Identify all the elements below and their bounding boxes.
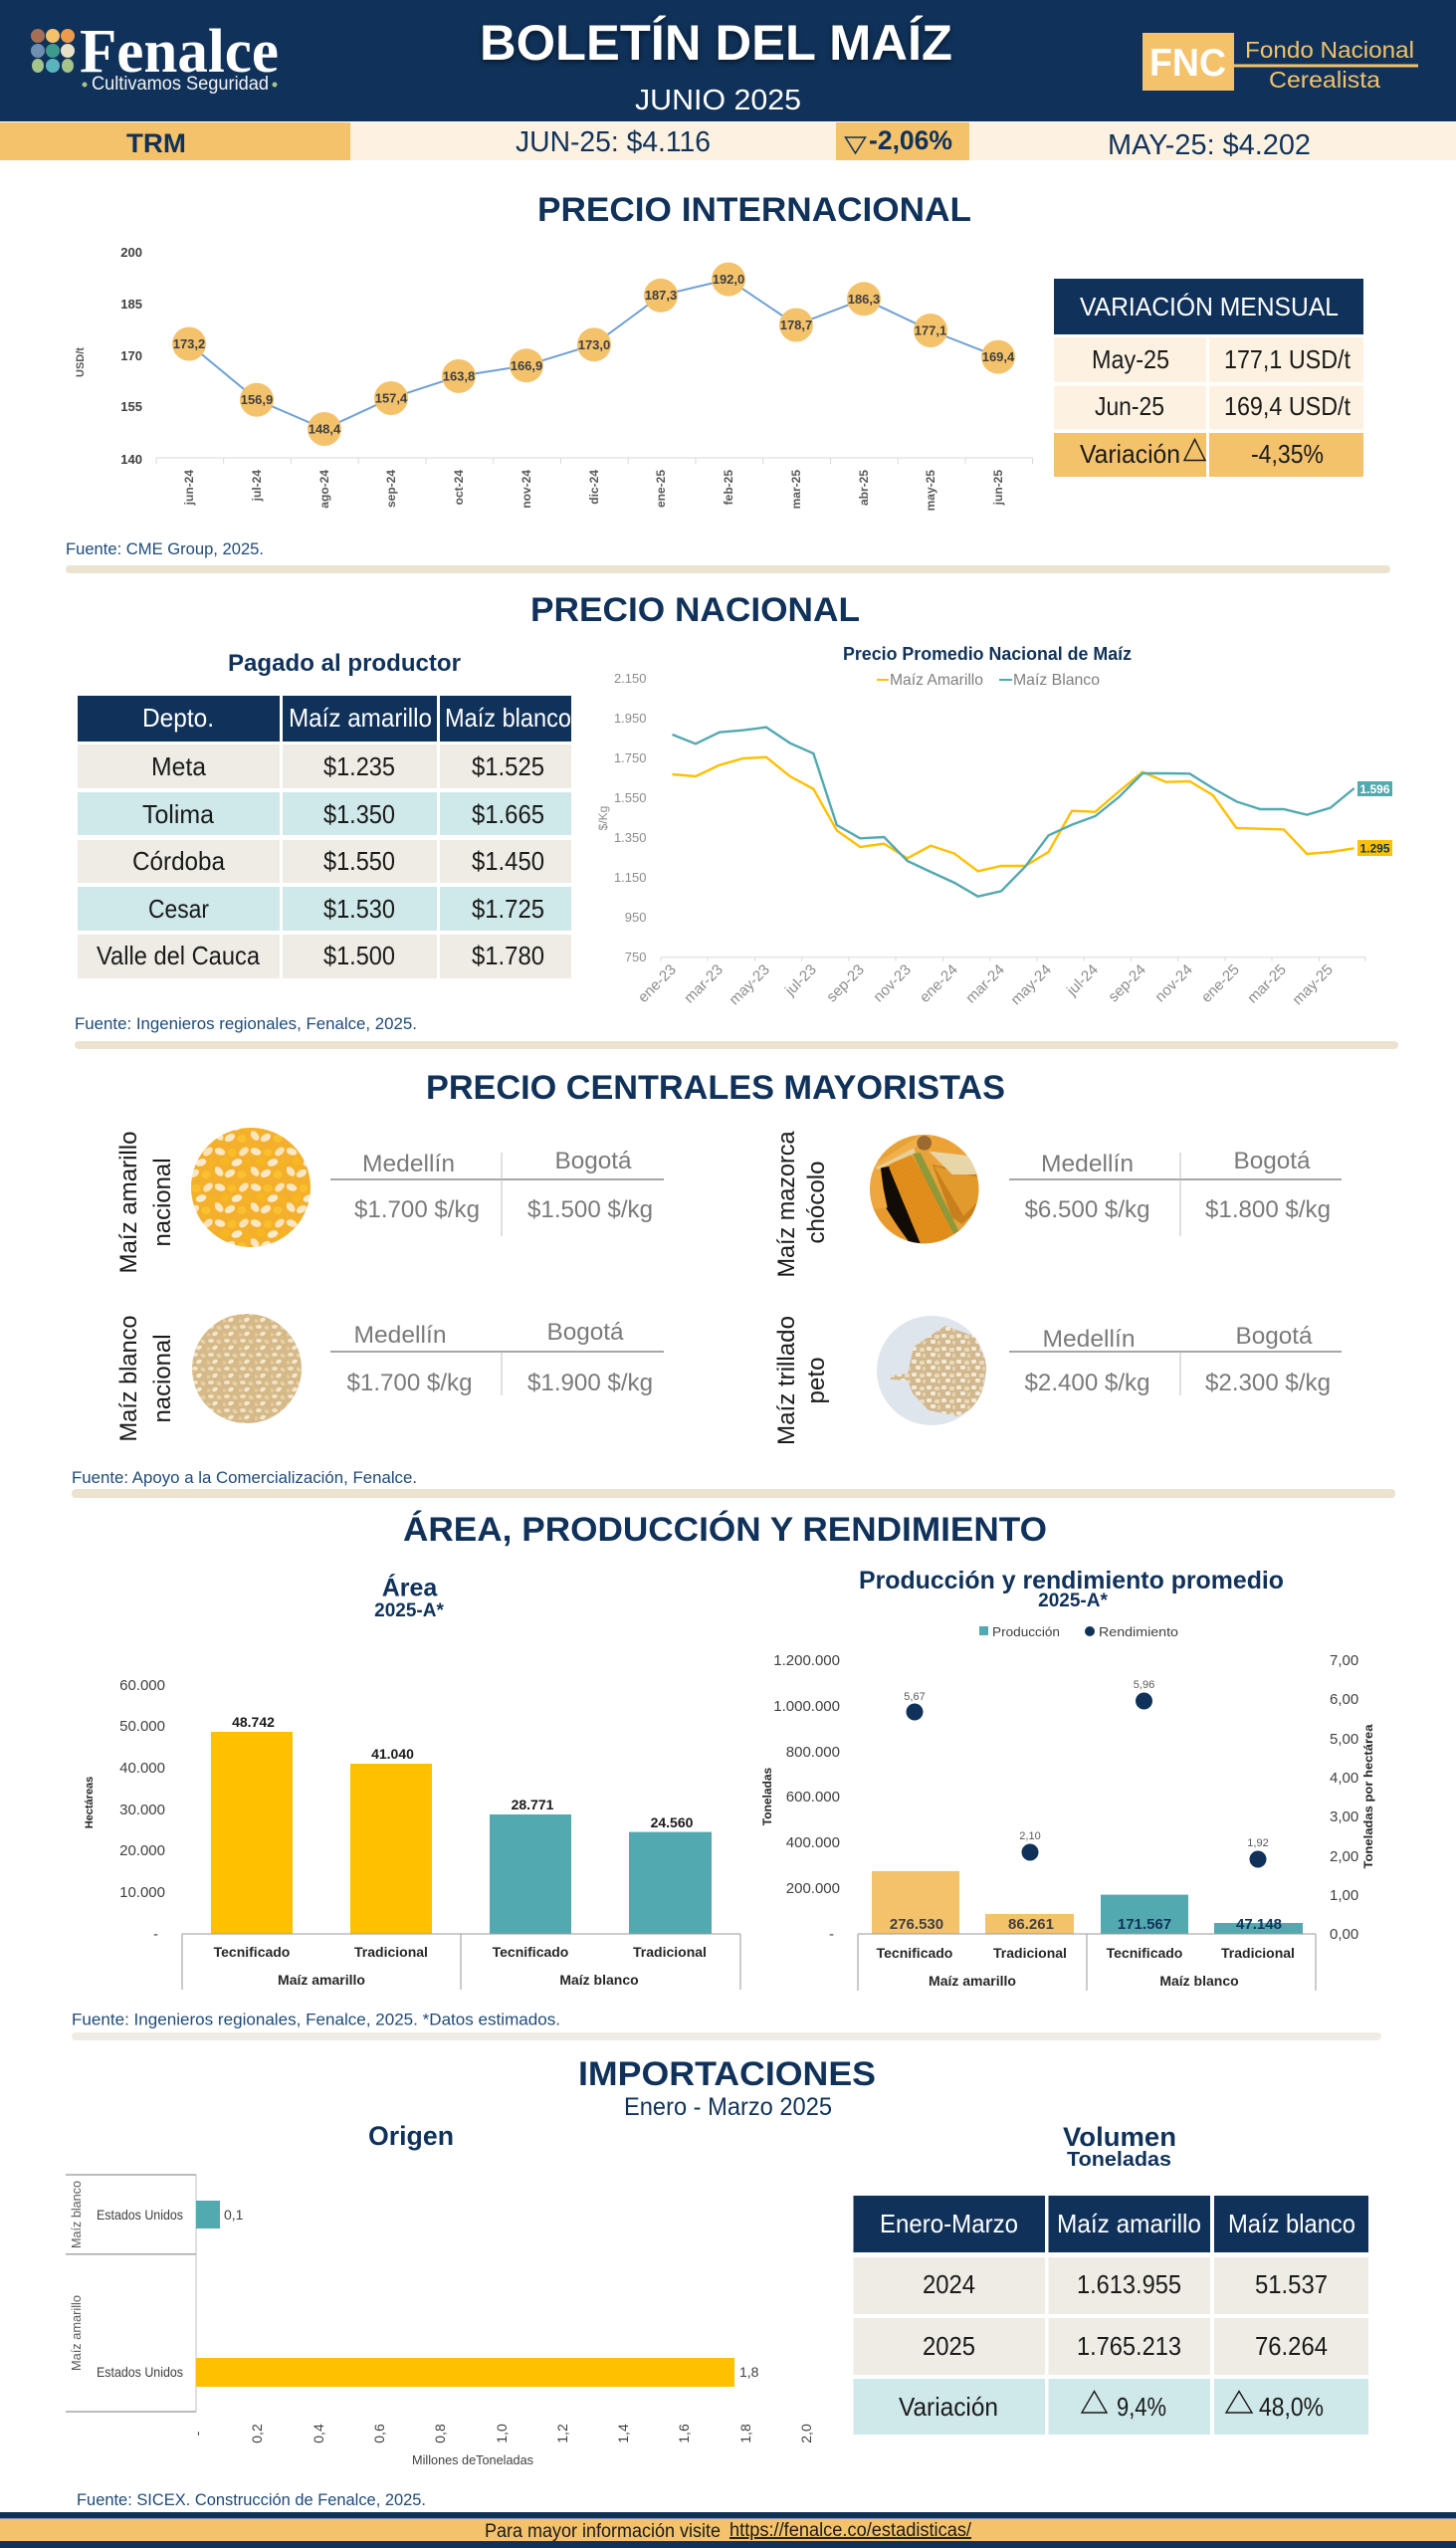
combo chart: producción y rendimiento: Maíz amarillo	[929, 1973, 1016, 1989]
table: volumen: Variación	[899, 2392, 998, 2422]
line chart: international price: 170	[120, 348, 142, 363]
subheading: period: Enero - Marzo 2025	[624, 2093, 832, 2121]
line chart: precio promedio nacional: 1.550	[614, 790, 647, 805]
logo: FNC	[1143, 33, 1418, 93]
line chart: international price	[75, 245, 1033, 511]
panel: maíz amarillo nacional: $1.500 $/kg	[527, 1196, 653, 1223]
line chart: precio promedio nacional: nov-24	[1151, 961, 1196, 1005]
line chart: precio promedio nacional: may-25	[1289, 961, 1337, 1008]
line chart: precio promedio nacional: nov-23	[870, 961, 915, 1005]
bar chart: área: 40.000	[119, 1760, 165, 1777]
line chart: precio promedio nacional: 1.950	[614, 711, 647, 726]
bar chart: área: 10.000	[119, 1884, 165, 1901]
line chart: international price: sep-24	[384, 470, 398, 508]
combo chart: producción y rendimiento: 47.148	[1236, 1916, 1282, 1933]
photo: white corn	[192, 1314, 302, 1423]
panel: maíz trillado peto: Medellín	[1043, 1326, 1135, 1353]
legend: Maíz Blanco	[1013, 672, 1100, 689]
bar chart: origen: -	[189, 2431, 205, 2436]
table: volumen: 48,0%	[1259, 2392, 1324, 2422]
bar chart: área: -	[153, 1926, 158, 1943]
logo: FNC: Cerealista	[1269, 67, 1380, 93]
chart heading: origen: Origen	[368, 2121, 454, 2151]
chart heading: área: 2025-A*	[374, 1600, 444, 1621]
TRM band	[0, 122, 1456, 161]
line chart: international price: dic-24	[587, 470, 601, 505]
TRM band: JUN-25: $4.116	[516, 126, 711, 158]
bar chart: área: Tecnificado	[214, 1944, 290, 1960]
line chart: precio promedio nacional: jul-23	[781, 961, 820, 999]
table: pagado al productor: Valle del Cauca	[97, 941, 260, 970]
panel: maíz trillado peto	[773, 1316, 1342, 1445]
line chart: international price: oct-24	[452, 470, 466, 505]
table: pagado al productor: $1.500	[323, 941, 395, 970]
line chart: international price: jun-25	[991, 470, 1005, 506]
legend	[979, 1624, 1178, 1639]
line chart: precio promedio nacional: sep-24	[1105, 961, 1149, 1005]
table: pagado al productor: $1.235	[323, 751, 395, 781]
subtitle: month: JUNIO 2025	[635, 85, 801, 116]
footer band	[0, 2512, 1456, 2548]
bar chart: origen: 1,8	[737, 2424, 753, 2443]
value tag: amarillo: 1.295	[1359, 842, 1390, 856]
combo chart: producción y rendimiento: 5,00	[1330, 1731, 1358, 1748]
source: SICEX: Fuente: SICEX. Construcción de Fenalce, 2025.	[77, 2490, 426, 2509]
bar chart: origen: Estados Unidos	[97, 2364, 183, 2380]
line chart: international price: nov-24	[520, 470, 533, 509]
line chart: precio promedio nacional: 750	[625, 950, 647, 964]
legend: Rendimiento	[1099, 1624, 1178, 1639]
panel: maíz blanco nacional: Bogotá	[547, 1319, 624, 1346]
chart heading: producción y rendimiento	[859, 1567, 1284, 1611]
line chart: precio promedio nacional: mar-24	[962, 961, 1008, 1006]
bar chart: origen: 0,1	[224, 2207, 244, 2223]
line chart: precio promedio nacional: 1.350	[614, 830, 647, 845]
source: CME: Fuente: CME Group, 2025.	[66, 539, 264, 558]
line chart: international price: 148,4	[309, 422, 341, 436]
line chart: international price: jul-24	[250, 470, 264, 502]
line chart: international price: 173,0	[578, 337, 610, 352]
legend: Producción	[992, 1624, 1060, 1639]
bar chart: origen: 1,0	[494, 2424, 510, 2443]
combo chart: producción y rendimiento: Tecnificado	[1107, 1945, 1182, 1961]
line chart: international price: 157,4	[375, 390, 408, 406]
table: pagado al productor: $1.550	[323, 846, 395, 876]
combo chart: producción y rendimiento: 5,96	[1134, 1679, 1154, 1691]
bar chart: área: Hectáreas	[84, 1777, 96, 1828]
line chart: precio promedio nacional: may-23	[726, 961, 773, 1008]
line chart: precio promedio nacional: 1.750	[614, 750, 647, 765]
panel: maíz trillado peto: $2.400 $/kg	[1025, 1370, 1150, 1396]
source: ingenieros regionales, datos estimados: Fuente: Ingenieros regionales, Fenalce, 2025. *Datos estimados.	[72, 2011, 560, 2028]
bar chart: origen: 1,2	[554, 2424, 570, 2443]
heading: importaciones: IMPORTACIONES	[578, 2055, 876, 2093]
table heading: volumen: Toneladas	[1067, 2149, 1171, 2171]
panel: maíz trillado peto: Maíz trillado	[773, 1316, 800, 1445]
line chart: international price: may-25	[924, 470, 937, 511]
line chart: international price: 140	[120, 452, 142, 467]
heading: precio internacional: PRECIO INTERNACIONAL	[537, 191, 971, 229]
line chart: precio promedio nacional: jul-24	[1063, 961, 1102, 999]
panel: maíz amarillo nacional: Medellín	[362, 1151, 455, 1177]
bar chart: área: 30.000	[119, 1802, 165, 1818]
combo chart: producción y rendimiento: 400.000	[786, 1834, 840, 1851]
panel: maíz blanco nacional: $1.700 $/kg	[346, 1370, 472, 1396]
bar chart: área: 60.000	[119, 1677, 165, 1694]
table: pagado al productor: Depto.	[142, 703, 214, 733]
table heading: volumen: Volumen	[1063, 2122, 1176, 2152]
panel: maíz blanco nacional	[115, 1314, 664, 1441]
table: variación mensual: 169,4 USD/t	[1224, 391, 1352, 421]
bar chart: origen: 1,6	[676, 2424, 692, 2443]
panel: maíz trillado peto: peto	[803, 1358, 830, 1403]
table: variación mensual: May-25	[1092, 344, 1169, 374]
legend: Maíz Amarillo	[890, 672, 983, 689]
panel: maíz amarillo nacional: Bogotá	[555, 1148, 632, 1174]
panel: maíz mazorca chócolo: chócolo	[803, 1161, 830, 1244]
line chart: international price: 187,3	[645, 288, 677, 303]
line chart: international price: 177,1	[915, 322, 946, 338]
combo chart: producción y rendimiento	[760, 1624, 1375, 1991]
table: pagado al productor: $1.780	[472, 941, 544, 970]
table: pagado al productor	[78, 696, 571, 978]
line chart: precio promedio nacional: may-24	[1007, 961, 1055, 1008]
bar chart: origen: 0,4	[311, 2424, 326, 2443]
logo: Fenalce: Fenalce	[80, 18, 279, 86]
bar chart: origen: Estados Unidos	[97, 2207, 183, 2223]
TRM band: TRM	[126, 128, 186, 158]
photo: yellow corn	[191, 1128, 311, 1247]
line chart: international price: mar-25	[789, 470, 803, 509]
bar chart: origen: Maíz amarillo	[69, 2295, 84, 2371]
table: variación mensual: -4,35%	[1251, 439, 1324, 469]
heading: área, producción y rendimiento: ÁREA, PRODUCCIÓN Y RENDIMIENTO	[403, 1511, 1047, 1549]
footer band: Para mayor información visite	[485, 2521, 721, 2542]
panel: maíz mazorca chócolo: $6.500 $/kg	[1025, 1196, 1150, 1223]
table: pagado al productor: $1.450	[472, 846, 544, 876]
logo: FNC: Fondo Nacional	[1245, 37, 1414, 63]
line chart: international price: 166,9	[511, 358, 542, 373]
bar chart: origen	[66, 2175, 814, 2467]
table: variación mensual: Variación	[1080, 439, 1180, 469]
title: BOLETÍN DEL MAÍZ	[480, 15, 952, 71]
bar chart: área: 50.000	[119, 1718, 165, 1735]
table: volumen: 76.264	[1255, 2331, 1328, 2361]
line chart: precio promedio nacional: mar-23	[681, 961, 727, 1006]
line chart: precio promedio nacional: 2.150	[614, 671, 647, 686]
line chart: precio promedio nacional: mar-25	[1244, 961, 1290, 1006]
combo chart: producción y rendimiento: 1,00	[1330, 1887, 1358, 1904]
line chart: precio promedio nacional: Precio Promedio Nacional de Maíz	[843, 644, 1132, 664]
combo chart: producción y rendimiento: Tradicional	[993, 1945, 1067, 1961]
table: variación mensual: Jun-25	[1095, 391, 1164, 421]
panel: maíz blanco nacional: Maíz blanco	[115, 1316, 142, 1441]
heading: precio nacional: PRECIO NACIONAL	[530, 591, 860, 629]
bar chart: origen: 0,8	[432, 2424, 448, 2443]
table: volumen: Maíz blanco	[1228, 2209, 1355, 2238]
panel: maíz mazorca chócolo: $1.800 $/kg	[1205, 1196, 1331, 1223]
heading: centrales mayoristas: PRECIO CENTRALES MAYORISTAS	[426, 1069, 1005, 1107]
TRM band: -2,06%	[869, 125, 952, 155]
table: variación mensual	[1054, 279, 1363, 477]
chart heading: producción y rendimiento: 2025-A*	[1038, 1591, 1108, 1611]
bar chart: área: Tecnificado	[493, 1944, 568, 1960]
combo chart: producción y rendimiento: 5,67	[904, 1691, 926, 1703]
table: volumen: Enero-Marzo	[880, 2209, 1018, 2238]
line chart: international price: 200	[120, 245, 142, 260]
bar chart: origen: 1,4	[615, 2424, 631, 2443]
panel: maíz amarillo nacional	[115, 1128, 664, 1274]
combo chart: producción y rendimiento: 86.261	[1008, 1916, 1054, 1933]
chart heading: área	[374, 1573, 444, 1621]
legend	[877, 672, 1100, 689]
line chart: precio promedio nacional: 1.150	[614, 870, 647, 885]
combo chart: producción y rendimiento: 3,00	[1330, 1808, 1358, 1825]
combo chart: producción y rendimiento: -	[829, 1926, 834, 1943]
combo chart: producción y rendimiento: Toneladas por hectárea	[1361, 1724, 1375, 1869]
table: pagado al productor: $1.725	[472, 894, 544, 924]
table: volumen: 9,4%	[1117, 2392, 1166, 2422]
combo chart: producción y rendimiento: Toneladas	[760, 1767, 774, 1825]
bar chart: área: 48.742	[232, 1714, 275, 1730]
chart heading: área: Área	[382, 1573, 438, 1602]
table: variación mensual: 177,1 USD/t	[1224, 344, 1352, 374]
table: pagado al productor: $1.350	[323, 799, 395, 829]
line chart: international price: feb-25	[722, 470, 735, 505]
line chart: international price: 169,4	[982, 349, 1015, 364]
bar chart: área: 28.771	[512, 1797, 554, 1812]
photo: corn cob	[869, 1134, 980, 1245]
table: volumen: 1.613.955	[1077, 2269, 1181, 2299]
logo: Fenalce: Cultivamos Seguridad	[92, 74, 269, 95]
line chart: international price: 178,7	[780, 318, 812, 332]
line chart: precio promedio nacional: 950	[625, 910, 647, 925]
table: pagado al productor: $1.665	[472, 799, 544, 829]
panel: maíz trillado peto: $2.300 $/kg	[1205, 1370, 1331, 1396]
table: pagado al productor: Maíz amarillo	[289, 703, 432, 733]
line chart: international price: 186,3	[848, 292, 880, 307]
combo chart: producción y rendimiento: 7,00	[1330, 1652, 1358, 1669]
panel: maíz mazorca chócolo	[773, 1131, 1342, 1278]
combo chart: producción y rendimiento: 6,00	[1330, 1691, 1358, 1708]
combo chart: producción y rendimiento: Tradicional	[1221, 1945, 1295, 1961]
combo chart: producción y rendimiento: 0,00	[1330, 1926, 1358, 1943]
source: ingenieros regionales: Fuente: Ingenieros regionales, Fenalce, 2025.	[75, 1014, 417, 1033]
line chart: international price: jun-24	[182, 470, 196, 506]
bar chart: origen: Maíz blanco	[69, 2181, 84, 2248]
table heading: pagado al productor: Pagado al productor	[228, 650, 461, 677]
icon: triangle	[1184, 440, 1205, 460]
combo chart: producción y rendimiento: 2,10	[1019, 1830, 1041, 1842]
line chart: international price: 163,8	[443, 368, 475, 384]
icon: triangle blanco	[1226, 2391, 1252, 2413]
combo chart: producción y rendimiento: Tecnificado	[877, 1945, 952, 1961]
combo chart: producción y rendimiento: 171.567	[1118, 1916, 1171, 1933]
panel: maíz mazorca chócolo: Bogotá	[1234, 1148, 1311, 1174]
icon: down triangle	[846, 137, 866, 153]
combo chart: producción y rendimiento: 4,00	[1330, 1770, 1358, 1787]
bar chart: área: 24.560	[651, 1814, 694, 1830]
table: volumen: Maíz amarillo	[1057, 2209, 1201, 2238]
panel: maíz amarillo nacional: Maíz amarillo	[115, 1131, 142, 1274]
bar chart: área: 20.000	[119, 1842, 165, 1859]
table: volumen: 2024	[923, 2269, 975, 2299]
bar chart: origen: 2,0	[798, 2424, 814, 2443]
bar chart: área: Maíz blanco	[559, 1972, 639, 1988]
bar chart: área: 41.040	[371, 1746, 414, 1762]
source: apoyo a la comercialización: Fuente: Apoyo a la Comercialización, Fenalce.	[72, 1468, 417, 1487]
line chart: international price: ago-24	[317, 470, 331, 509]
line chart: precio promedio nacional: $/Kg	[596, 806, 610, 830]
panel: maíz mazorca chócolo: Medellín	[1041, 1151, 1134, 1177]
panel: maíz amarillo nacional: $1.700 $/kg	[354, 1196, 480, 1223]
table: pagado al productor: Tolima	[142, 799, 215, 829]
line chart: precio promedio nacional: ene-24	[917, 961, 961, 1006]
table: variación mensual: VARIACIÓN MENSUAL	[1080, 292, 1339, 321]
photo: hulled corn	[877, 1316, 986, 1425]
combo chart: producción y rendimiento: 200.000	[786, 1880, 840, 1897]
header band	[0, 0, 1456, 121]
combo chart: producción y rendimiento: 1.000.000	[773, 1698, 840, 1715]
combo chart: producción y rendimiento: 1,92	[1247, 1837, 1269, 1849]
table heading: volumen	[1063, 2122, 1176, 2171]
line chart: international price: abr-25	[857, 470, 871, 506]
line chart: international price: 155	[120, 399, 142, 414]
icon: triangle amarillo	[1082, 2391, 1107, 2413]
line chart: international price: ene-25	[654, 470, 668, 508]
table: pagado al productor: Maíz blanco	[445, 703, 571, 733]
panel: maíz amarillo nacional: nacional	[149, 1159, 176, 1246]
table: volumen	[854, 2196, 1368, 2435]
table: volumen: 1.765.213	[1077, 2331, 1181, 2361]
line chart: international price: 185	[120, 297, 142, 312]
table: volumen: 2025	[923, 2331, 975, 2361]
bar chart: área: Tradicional	[354, 1944, 428, 1960]
bar chart: área: Maíz amarillo	[278, 1972, 365, 1988]
combo chart: producción y rendimiento: Maíz blanco	[1159, 1973, 1239, 1989]
line chart: precio promedio nacional: sep-23	[823, 961, 868, 1005]
combo chart: producción y rendimiento: 2,00	[1330, 1848, 1358, 1865]
line chart: international price: 192,0	[713, 272, 744, 287]
table: volumen: 51.537	[1255, 2269, 1328, 2299]
bar chart: origen: Millones deToneladas	[412, 2452, 533, 2467]
panel: maíz blanco nacional: $1.900 $/kg	[527, 1370, 653, 1396]
panel: maíz blanco nacional: nacional	[149, 1334, 176, 1423]
line chart: international price: 156,9	[241, 392, 273, 407]
panel: maíz mazorca chócolo: Maíz mazorca	[773, 1131, 800, 1278]
combo chart: producción y rendimiento: 1.200.000	[773, 1652, 840, 1669]
value tag: blanco: 1.596	[1359, 782, 1390, 796]
footer band: https://fenalce.co/estadisticas/	[729, 2520, 972, 2541]
bar chart: origen: 0,6	[371, 2424, 387, 2443]
table: pagado al productor: Cesar	[148, 894, 209, 924]
combo chart: producción y rendimiento: 600.000	[786, 1789, 840, 1805]
bar chart: área	[84, 1677, 740, 1990]
table: pagado al productor: Córdoba	[132, 846, 226, 876]
panel: maíz blanco nacional: Medellín	[354, 1322, 446, 1349]
chart heading: producción y rendimiento: Producción y rendimiento promedio	[859, 1567, 1284, 1594]
logo: FNC: FNC	[1149, 42, 1226, 85]
line chart: international price: USD/t	[75, 347, 87, 377]
bar chart: origen: 0,2	[249, 2424, 265, 2443]
bar chart: origen: 1,8	[739, 2364, 759, 2380]
line chart: precio promedio nacional	[596, 644, 1392, 1008]
TRM band: MAY-25: $4.202	[1108, 129, 1311, 161]
combo chart: producción y rendimiento: 276.530	[890, 1916, 943, 1933]
line chart: precio promedio nacional: ene-25	[1198, 961, 1243, 1006]
table: pagado al productor: $1.525	[472, 751, 544, 781]
line chart: international price: 173,2	[173, 336, 205, 351]
panel: maíz trillado peto: Bogotá	[1236, 1323, 1313, 1350]
table: pagado al productor: Meta	[151, 751, 207, 781]
combo chart: producción y rendimiento: 800.000	[786, 1744, 840, 1761]
table: pagado al productor: $1.530	[323, 894, 395, 924]
line chart: precio promedio nacional: ene-23	[635, 961, 680, 1006]
bar chart: área: Tradicional	[633, 1944, 707, 1960]
